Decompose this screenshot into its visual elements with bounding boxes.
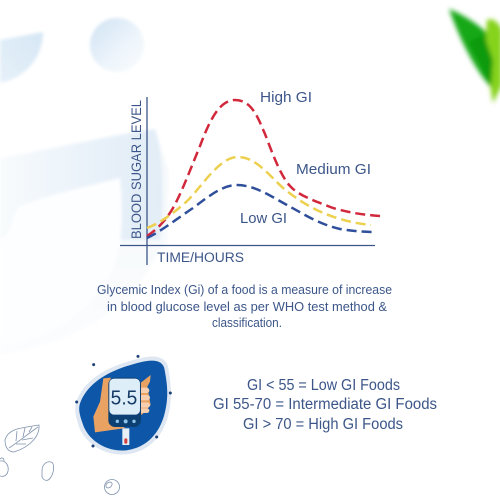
fingers	[139, 388, 150, 413]
leaf decoration: top right	[449, 9, 500, 103]
doodle: berry right	[104, 480, 120, 494]
axis: horizontal	[120, 244, 375, 246]
classification text: GI < 55 = Low GI Foods	[247, 377, 400, 394]
background shape: large pale swoosh	[0, 129, 168, 355]
background shape: circle	[90, 18, 144, 72]
label: medium GI: Medium GI	[296, 161, 371, 178]
label: y axis: BLOOD SUGAR LEVEL	[129, 100, 144, 239]
blood drop	[124, 438, 127, 444]
doodles: leaf and berries	[0, 425, 120, 494]
hand	[93, 375, 151, 432]
doodle: berry middle	[42, 462, 54, 480]
description text: classification.	[212, 316, 282, 330]
description text: Glycemic Index (Gi) of a food is a measure of increase	[97, 283, 392, 297]
label: low GI: Low GI	[240, 210, 287, 227]
axis: vertical	[146, 97, 148, 265]
sparkles	[75, 355, 172, 447]
background shape: top-left arc	[0, 32, 43, 83]
meter reading: 5.5	[111, 386, 137, 409]
chart: glycemic response curves	[120, 89, 380, 265]
label: high GI: High GI	[260, 89, 312, 106]
blob fill	[79, 361, 167, 451]
description text	[97, 283, 392, 330]
meter buttons	[116, 419, 136, 423]
curve: low GI	[147, 185, 376, 238]
classification text	[213, 377, 437, 433]
doodle: leaf	[5, 425, 39, 452]
meter body	[108, 378, 141, 427]
blob outline	[75, 357, 171, 455]
icon: glucose meter in hand	[75, 355, 172, 455]
test strip	[122, 428, 129, 445]
curve: medium GI	[147, 157, 371, 228]
label: x axis: TIME/HOURS	[157, 250, 244, 265]
classification text: GI 55-70 = Intermediate GI Foods	[213, 396, 437, 413]
description text: in blood glucose level as per WHO test method &	[107, 300, 388, 314]
curve: high GI	[147, 100, 380, 236]
meter screen	[109, 379, 140, 415]
classification text: GI > 70 = High GI Foods	[243, 416, 403, 433]
doodle: berry left	[0, 458, 8, 476]
